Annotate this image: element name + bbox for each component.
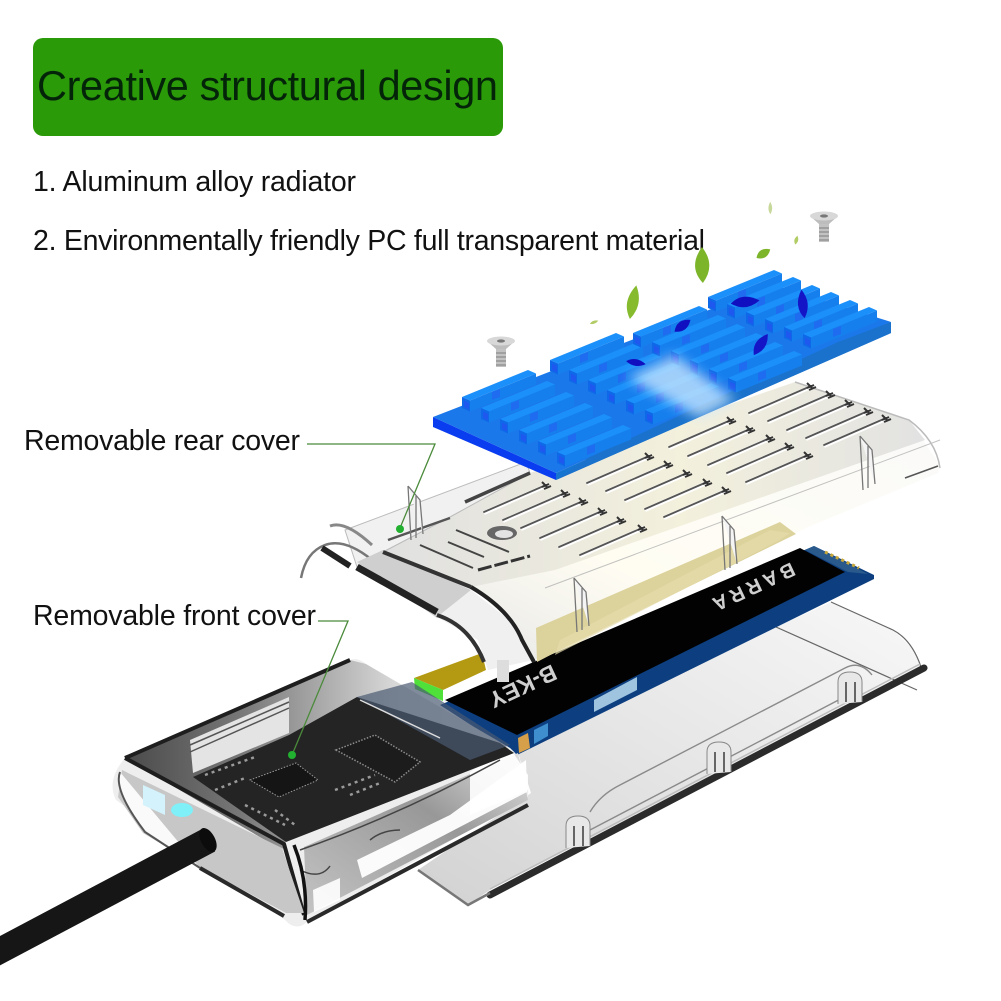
PCB components [205, 757, 380, 825]
B-KEY label: B-KEY [485, 659, 561, 713]
rear cover dark bands [322, 548, 350, 566]
front lower rim [200, 805, 528, 922]
SSD green end [414, 678, 443, 701]
feature list: 2. Environmentally friendly PC full transparent material [33, 225, 705, 257]
brass screw post [497, 660, 509, 682]
bottom case tray [418, 602, 924, 905]
callout: removable front cover: Removable front cover [33, 600, 316, 632]
rear cover clips [408, 486, 423, 540]
tray posts [566, 816, 590, 848]
heatsink ridges [462, 270, 877, 466]
blue leaves [730, 295, 760, 308]
blue LED [171, 803, 193, 817]
rounded right end [470, 748, 528, 815]
tray rim [490, 668, 924, 895]
rear cover top plate [383, 382, 925, 587]
blue PCB end [357, 682, 510, 760]
SSD gold contacts [414, 653, 486, 690]
SSD chips strip [518, 733, 530, 753]
feature list: 1. Aluminum alloy radiator [33, 166, 356, 198]
feature list [33, 166, 705, 257]
rear cover small slots [420, 530, 509, 568]
screw hole [487, 526, 517, 540]
side highlight [357, 760, 527, 878]
floating leaves [589, 202, 809, 368]
rear cover side wall [471, 420, 940, 660]
callout: removable rear cover: Removable rear cover [24, 425, 300, 457]
top rim [125, 660, 350, 915]
rear cover lip [301, 543, 372, 578]
rear cover back flange [345, 462, 530, 567]
PCB dark area [193, 697, 514, 842]
front cover side wall [304, 753, 528, 915]
USB cable [0, 825, 220, 956]
rear cover slots [484, 383, 891, 556]
screw: right [810, 212, 838, 242]
front cover body [113, 659, 528, 927]
rear cover right end [795, 382, 940, 468]
glass window [190, 697, 289, 773]
heatsink front side [556, 322, 891, 480]
smoky top surface [125, 660, 510, 850]
aluminum heatsink [433, 270, 891, 480]
rear cover [301, 382, 940, 682]
face highlight [119, 772, 200, 868]
heatsink left side [433, 417, 556, 480]
front cover with circuit board [113, 659, 528, 927]
front face [118, 770, 304, 913]
title banner [33, 38, 503, 136]
heatsink top plate [433, 285, 891, 473]
main chip [250, 763, 318, 797]
BARRA label: BARRA [705, 557, 798, 616]
callout: removable rear cover [24, 425, 435, 533]
screw: left [487, 336, 515, 367]
air flow glow [628, 355, 735, 418]
side circuitry reflection [300, 760, 500, 874]
heatsink front step [556, 322, 891, 480]
second chip [336, 735, 420, 782]
M.2 SSD board [414, 546, 874, 755]
translucent gold print [536, 522, 796, 662]
callout: removable front cover [33, 600, 348, 759]
title banner: Creative structural design [37, 62, 498, 109]
